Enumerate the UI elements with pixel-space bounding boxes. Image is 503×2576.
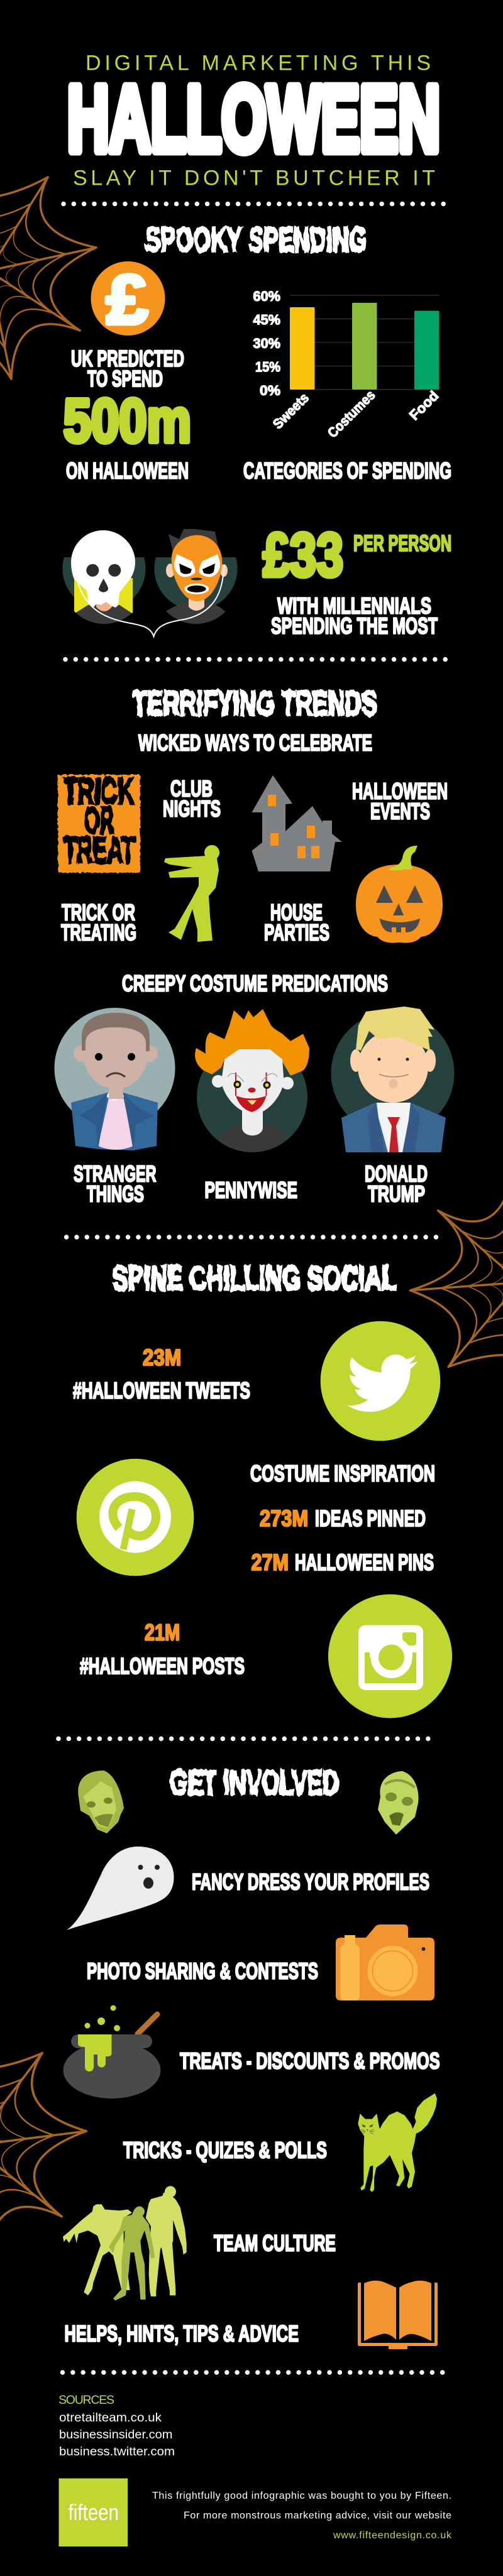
label: trick or treating: TREATING [61,920,136,945]
skull person [63,530,146,628]
label: trick or treating [61,900,136,945]
sources list: business.twitter.com [59,2445,175,2459]
y axis labels: 45% [253,312,280,328]
label: club nights [163,775,221,822]
label: trick or treating: TRICK OR [62,900,135,925]
label: tricks: TRICKS - QUIZES & POLLS [123,2137,327,2163]
footer credit: For more monstrous marketing advice, visit our website [184,2511,451,2521]
stat: 273M ideas pinned: 273M [260,1505,308,1531]
icon: cauldron [63,2006,161,2098]
stat: 27M halloween pins: HALLOWEEN PINS [295,1549,434,1575]
stat: 27M halloween pins [252,1549,434,1575]
label: donald trump [365,1161,428,1206]
divider dots [67,1235,446,1240]
label: stranger things [74,1161,156,1206]
label: halloween posts: #HALLOWEEN POSTS [80,1653,245,1679]
icon: zombie walking [164,845,219,942]
spider web top left [0,177,96,379]
icon: pinterest [77,1459,194,1576]
label: stranger things: STRANGER [74,1161,156,1186]
label: house parties: PARTIES [264,920,329,945]
icon: cat [358,2093,437,2192]
label: house parties [264,900,329,945]
label: donald trump: TRUMP [368,1181,425,1206]
icon: pound coin [91,261,165,339]
earphone cable [77,565,224,636]
spider web right [401,1160,503,1390]
sources list [59,2411,175,2459]
divider dots [58,1737,438,1741]
icon: trick or treat sign: TRICK [64,771,134,812]
label: halloween events: EVENTS [370,798,430,824]
label: pennywise: PENNYWISE [205,1177,297,1203]
illustration: millennials with earphones [63,529,238,636]
panel: pinterest [77,1459,435,1576]
portrait: pennywise [195,1009,309,1156]
portrait: donald trump [331,1007,454,1152]
millennials text: WITH MILLENNIALS [277,593,431,618]
bars [290,303,439,390]
y axis labels [253,288,280,398]
icon: trick or treat sign: TREAT [64,830,135,871]
icon: trick or treat sign [58,771,140,873]
subheading: costume predications: CREEPY COSTUME PREDICATIONS [122,970,388,996]
label: helps hints: HELPS, HINTS, TIPS & ADVICE [64,2321,299,2346]
x axis labels: Costumes [324,387,378,441]
label: club nights: CLUB [170,775,213,802]
label: halloween events [352,778,448,824]
label: halloween tweets: #HALLOWEEN TWEETS [73,1377,250,1404]
label: donald trump: DONALD [365,1161,428,1186]
per person: PER PERSON [353,530,451,556]
sources list: businessinsider.com [59,2428,172,2442]
spend text [71,346,184,391]
stat: 27M halloween pins: 27M [252,1549,289,1575]
icon: zombie head right [378,1771,419,1835]
icon: twitter [321,1321,440,1441]
stat: 273M ideas pinned [260,1505,426,1531]
stat: 21M: 21M [145,1620,180,1645]
label: team culture: TEAM CULTURE [214,2230,336,2256]
footer credit: This frightfully good infographic was bought to you by Fifteen. [152,2491,451,2501]
section heading: terrifying trends: TERRIFYING TRENDS [133,684,377,723]
spider web bottom left [0,2038,93,2269]
icon: haunted house [252,775,342,871]
stat: 273M ideas pinned: IDEAS PINNED [315,1505,426,1531]
logo: fifteen: fifteen [68,2499,119,2525]
subtitle: SLAY IT DON'T BUTCHER IT [73,166,435,190]
icon: pound coin: £ [106,261,148,339]
x axis labels: Sweets [270,390,312,432]
footer credit [152,2491,452,2541]
footer credit: www.fifteendesign.co.uk [333,2530,452,2541]
panel: UK spend [64,261,191,484]
logo: fifteen [59,2479,128,2546]
spend text: UK PREDICTED [71,346,184,371]
y axis labels: 0% [260,383,280,398]
on halloween: ON HALLOWEEN [66,457,189,484]
panel: twitter [73,1321,440,1441]
panel: ways to celebrate [58,771,448,945]
icon: book [358,2281,438,2349]
bar chart: categories of spending [243,288,451,484]
y axis labels: 15% [255,359,280,374]
icon: zombie head left [78,1771,124,1833]
millennials text [271,593,438,638]
spend text: TO SPEND [87,366,163,391]
y axis labels: 60% [253,288,280,304]
subheading: wicked ways: WICKED WAYS TO CELEBRATE [138,730,372,755]
label: club nights: NIGHTS [163,795,221,822]
stat: 23M: 23M [143,1345,181,1370]
title kicker: DIGITAL MARKETING THIS [86,52,431,75]
x axis labels [270,387,441,441]
x axis labels: Food [406,388,441,423]
label: house parties: HOUSE [270,900,323,925]
divider dots [63,2370,443,2375]
icon: instagram [328,1595,452,1718]
section heading: spooky spending: SPOOKY SPENDING [145,220,367,259]
title block [67,52,440,190]
portrait: stranger things [54,1008,175,1150]
label: photo sharing: PHOTO SHARING & CONTESTS [87,1958,318,1984]
sources list: otretailteam.co.uk [59,2411,162,2425]
icon: pumpkin [356,846,443,943]
panel: get involved list [63,1847,439,2349]
panel: costume predictions [54,1007,454,1206]
icon: ghost [67,1847,174,1930]
big number: £33: £33 [263,520,343,589]
panel: instagram [80,1595,452,1718]
icon: camera [336,1924,434,2000]
sources block [58,2393,175,2459]
icon: zombies group [63,2186,187,2301]
divider dots [64,202,445,206]
y axis labels: 30% [253,336,280,351]
label: stranger things: THINGS [87,1181,144,1206]
divider dots [65,657,446,662]
masked wrestler person [155,529,238,624]
section heading: get involved: GET INVOLVED [170,1763,339,1802]
big number: 500m: 500m [64,386,191,455]
panel: per person stat [263,520,451,638]
label: halloween events: HALLOWEEN [352,778,448,804]
icon: trick or treat sign: OR [84,800,114,841]
sources heading: SOURCES [58,2393,114,2407]
footer [59,2479,452,2546]
